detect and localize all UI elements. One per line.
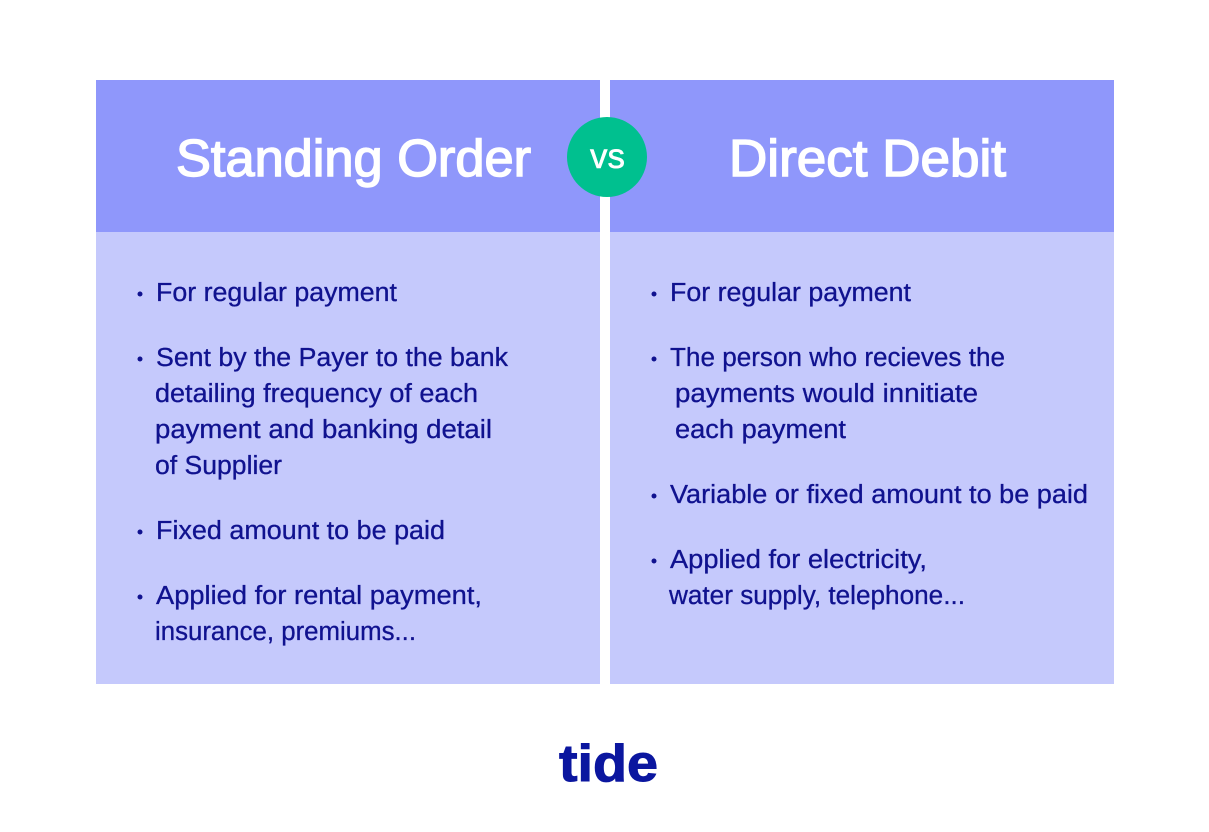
- bullet: person who receives: [652, 344, 1005, 444]
- bullet: regular payment: For regular payment: [156, 279, 397, 307]
- bullet: sent by the payer: detailing frequency of each: [155, 380, 478, 408]
- panel: standing order: [96, 80, 600, 684]
- bullet: sent by the payer: Sent by the Payer to the bank: [156, 344, 508, 372]
- bullet: applied for rental: [138, 582, 482, 646]
- bullet: applied for electricity: Applied for electricity,: [670, 546, 927, 574]
- bullet: sent by the payer: of Supplier: [155, 452, 283, 480]
- panel header: standing order: [96, 80, 600, 232]
- bullet: applied for electricity: water supply, telephone...: [668, 582, 965, 610]
- bullet: applied for rental: insurance, premiums...: [155, 618, 416, 646]
- panel: direct debit: [610, 80, 1114, 684]
- bullet: person who receives: payments would innitiate: [675, 380, 978, 408]
- heading: Standing Order: Standing Order: [176, 130, 531, 188]
- heading: Direct Debit: Direct Debit: [729, 130, 1007, 188]
- vs badge: [567, 117, 647, 197]
- logo: tide: tide: [559, 735, 658, 793]
- panel body: standing order: [96, 232, 600, 684]
- bullet: regular payment: For regular payment: [670, 279, 911, 307]
- bullet: applied for rental: Applied for rental payment,: [156, 582, 482, 610]
- bullet: sent by the payer: [138, 344, 508, 480]
- panel header: direct debit: [610, 80, 1114, 232]
- bullet: applied for electricity: [652, 546, 965, 610]
- bullet list: standing order: [138, 279, 508, 646]
- bullet: sent by the payer: payment and banking detail: [155, 416, 492, 444]
- bullet: variable or fixed: Variable or fixed amount to be paid: [670, 481, 1088, 509]
- bullet: person who receives: The person who recieves the: [670, 344, 1005, 372]
- panel body: direct debit: [610, 232, 1114, 684]
- bullet: person who receives: each payment: [675, 416, 846, 444]
- bullet list: direct debit: [652, 279, 1088, 610]
- vs badge: vs: [590, 137, 625, 176]
- bullet: fixed amount: Fixed amount to be paid: [156, 517, 445, 545]
